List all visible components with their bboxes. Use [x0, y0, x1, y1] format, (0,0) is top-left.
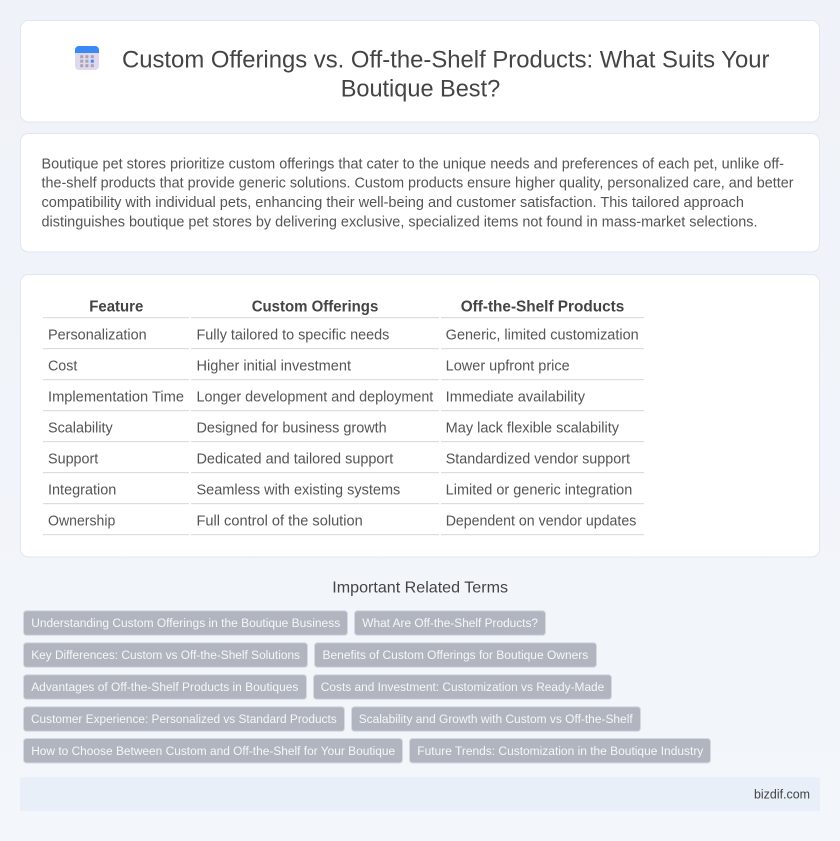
- icon: calendar: [75, 46, 99, 70]
- table row: implementation time: Implementation Time: [48, 389, 184, 405]
- tag: How to Choose Between Custom and Off-the-Shelf for Your Boutique: [31, 744, 395, 758]
- table row: personalization: Generic, limited customization: [446, 327, 639, 343]
- table row: ownership: Ownership: [48, 513, 115, 529]
- tag: Future Trends: Customization in the Boutique Industry: [417, 744, 704, 758]
- panel: comparison table: [20, 274, 820, 557]
- tag: [24, 643, 308, 667]
- tag: Key Differences: Custom vs Off-the-Shelf Solutions: [31, 648, 300, 662]
- table row: ownership: [43, 513, 644, 535]
- tag: [24, 738, 402, 763]
- table row: scalability: Scalability: [48, 420, 113, 436]
- table row: personalization: [43, 327, 644, 349]
- tag: [352, 707, 640, 731]
- table row: support: Standardized vendor support: [446, 451, 630, 467]
- footer: [20, 778, 820, 811]
- title: Custom Offerings vs. Off-the-Shelf Products: What Suits Your: [122, 46, 770, 74]
- table row: cost: Lower upfront price: [446, 358, 570, 374]
- tag: [24, 707, 344, 731]
- table row: support: [43, 451, 644, 473]
- table row: ownership: Full control of the solution: [196, 513, 363, 529]
- tag: Understanding Custom Offerings in the Boutique Business: [31, 616, 340, 630]
- table header row: [43, 299, 644, 318]
- table row: integration: Integration: [48, 482, 116, 498]
- title: [122, 46, 770, 102]
- table row: support: Dedicated and tailored support: [196, 451, 393, 467]
- tag: [314, 675, 612, 699]
- table row: implementation time: Longer development and deployment: [196, 389, 433, 405]
- table header row: Off-the-Shelf Products: [461, 299, 624, 316]
- table row: ownership: Dependent on vendor updates: [446, 513, 636, 529]
- table header row: Custom Offerings: [252, 299, 378, 316]
- tag: Advantages of Off-the-Shelf Products in Boutiques: [31, 680, 298, 694]
- table row: support: Support: [48, 451, 98, 467]
- table row: cost: Higher initial investment: [196, 358, 351, 374]
- tag: [24, 675, 306, 699]
- tag: Customer Experience: Personalized vs Standard Products: [31, 712, 337, 726]
- tag: [410, 738, 710, 763]
- text block: intro: [42, 156, 794, 230]
- table row: integration: Limited or generic integration: [446, 482, 632, 498]
- tag: [354, 611, 546, 635]
- title: Boutique Best?: [341, 76, 500, 102]
- table row: scalability: [43, 420, 644, 442]
- table row: implementation time: [43, 389, 644, 411]
- tag: Costs and Investment: Customization vs Ready-Made: [321, 680, 605, 694]
- text block: intro: Boutique pet stores prioritize custom offerings that cater to the unique needs and preferences of each pet, unlike off-: [42, 156, 784, 172]
- tag: What Are Off-the-Shelf Products?: [362, 616, 538, 630]
- text block: intro: distinguishes boutique pet stores by delivering exclusive, specialized items not found in mass-market selections.: [42, 214, 757, 230]
- table row: scalability: May lack flexible scalability: [446, 420, 620, 436]
- table row: integration: [43, 482, 644, 504]
- tag: Benefits of Custom Offerings for Boutique Owners: [322, 648, 588, 662]
- tag: [314, 643, 596, 667]
- table row: personalization: Personalization: [48, 327, 147, 343]
- tag: [24, 611, 348, 635]
- table row: scalability: Designed for business growth: [196, 420, 387, 436]
- table row: integration: Seamless with existing systems: [196, 482, 400, 498]
- text block: intro: compatibility with individual pets, enhancing their well-being and customer satisfaction. This tailored approach: [42, 195, 744, 211]
- tag: Scalability and Growth with Custom vs Off-the-Shelf: [359, 712, 633, 726]
- footer: bizdif.com: [754, 786, 810, 801]
- table header row: Feature: [89, 299, 143, 316]
- tag list: [24, 611, 710, 763]
- panel: intro paragraph: [20, 134, 820, 252]
- text block: intro: the-shelf products that provide generic solutions. Custom products ensure higher quality, personalized care, and better: [42, 176, 794, 192]
- table row: personalization: Fully tailored to specific needs: [196, 327, 389, 343]
- table row: implementation time: Immediate availability: [446, 389, 586, 405]
- table row: cost: [43, 358, 644, 380]
- heading: important related terms: Important Related Terms: [332, 580, 508, 597]
- table row: cost: Cost: [48, 358, 77, 374]
- panel: header: [20, 20, 820, 122]
